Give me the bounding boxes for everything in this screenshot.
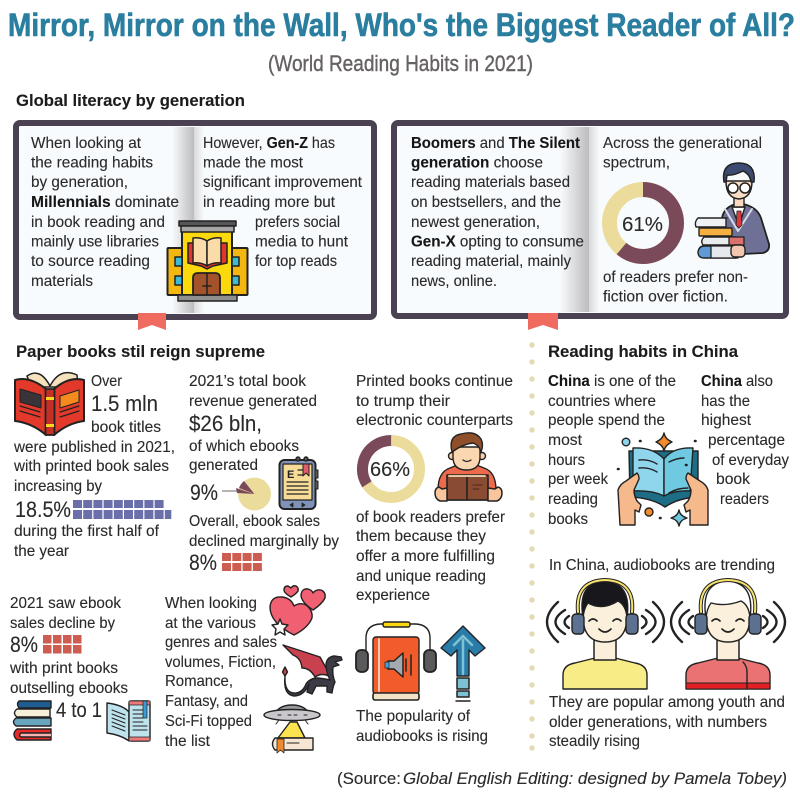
text: china hours: most — [548, 432, 583, 449]
text: genres: the list — [165, 733, 211, 750]
text: millennials: Millennials dominate — [31, 194, 179, 211]
text: china percentage: of everyday — [712, 452, 789, 469]
text: genres: When looking — [165, 595, 257, 612]
icon: hearts — [270, 586, 325, 635]
text: 4 to 1: 4 to 1 — [56, 699, 102, 722]
text: printed books: to trump their — [356, 393, 451, 410]
heading: china: Reading habits in China — [548, 342, 739, 361]
text: millennials: materials — [31, 273, 93, 290]
donut chart: 66%: 66% — [370, 459, 410, 481]
text: printed books: Printed books continue — [356, 373, 513, 390]
donut chart: 66% — [352, 430, 430, 508]
text: book readers prefer: of book readers prefer — [356, 509, 506, 526]
text: book revenue: $26 bln, — [189, 411, 262, 436]
text: ebook decline — [189, 513, 339, 575]
text: boomers: on bestsellers, and the — [411, 194, 561, 211]
text: china hours: hours — [548, 452, 585, 469]
text: 1.5 mln titles: were published in 2021, — [13, 439, 175, 456]
text: book readers prefer — [356, 509, 506, 604]
text: boomers: Boomers and The Silent — [411, 135, 581, 152]
text: generational spectrum: spectrum, — [603, 154, 670, 172]
text: ebook decline: 8% — [189, 550, 217, 575]
text: audiobooks popular — [549, 694, 785, 750]
pictogram: 8% squares second — [43, 635, 82, 654]
text: book readers prefer: experience — [356, 587, 430, 604]
text: audiobooks rising: audiobooks is rising — [356, 728, 488, 745]
text: gen-z — [203, 135, 363, 270]
text: 1.5 mln titles: Over — [91, 373, 123, 390]
text: genres: Sci-Fi topped — [165, 713, 252, 730]
text: boomers: newest generation, — [411, 214, 540, 231]
text: china percentage: highest — [701, 412, 752, 429]
text: audiobooks trending: In China, audiobooks are trending — [549, 557, 775, 574]
text: genres: volumes, Fiction, — [165, 654, 276, 671]
text: millennials: in book reading and — [31, 214, 165, 231]
arrow: rising popularity — [441, 626, 485, 701]
text: book revenue: revenue generated — [189, 393, 317, 410]
text: 1.5 mln titles: book titles — [91, 419, 161, 436]
text: printed books: electronic counterparts — [356, 412, 513, 429]
text: boomers: generation choose — [411, 154, 543, 172]
subtitle: (World Reading Habits in 2021) — [268, 51, 533, 76]
text: ebook decline: declined marginally by — [189, 533, 339, 550]
text: genres: Fantasy, and — [165, 693, 248, 710]
text: china hours: people spend the — [548, 412, 665, 429]
text: book revenue: generated — [189, 457, 258, 474]
panel: open book left — [16, 123, 374, 330]
text: gen-z: in reading more but — [203, 194, 336, 211]
icon: student with glasses and books — [695, 163, 769, 258]
text: millennials: When looking at — [31, 135, 142, 152]
text: generational spectrum — [603, 135, 762, 172]
text: china percentage — [701, 373, 789, 508]
text: boomers: Gen-X opting to consume — [411, 234, 584, 250]
text: generational spectrum: Across the generational — [603, 135, 762, 152]
text: china hours: countries where — [548, 393, 656, 410]
text: audiobooks rising — [356, 708, 488, 745]
text: non-fiction: of readers prefer non- — [603, 269, 748, 286]
text: book revenue: of which ebooks — [189, 438, 299, 455]
text: millennials: by generation, — [31, 174, 128, 191]
pie chart: 9% ebooks — [222, 478, 271, 510]
text: genres — [165, 595, 277, 750]
text: gen-z: made the most — [203, 154, 304, 172]
bookmark — [138, 313, 166, 330]
text: gen-z: However, Gen-Z has — [203, 135, 335, 152]
text: ebook sales decline: outselling ebooks — [10, 680, 128, 697]
text: gen-z: for top reads — [255, 253, 337, 270]
text: book readers prefer: and unique reading — [356, 568, 486, 585]
text: audiobooks rising: The popularity of — [356, 708, 471, 725]
text: china hours: books — [548, 511, 588, 528]
icon: ebook and print pair — [107, 701, 150, 741]
text: 1.5 mln titles: 18.5% — [15, 497, 71, 522]
icon: library building — [168, 221, 248, 301]
text: non-fiction: fiction over fiction. — [603, 288, 728, 306]
text: 1.5 mln titles: with printed book sales — [13, 458, 169, 475]
text: millennials: mainly use libraries — [31, 234, 159, 250]
donut chart: 61%: 61% — [622, 214, 663, 236]
icon: stack of print books — [14, 701, 51, 740]
text: gen-z: media to hunt — [255, 234, 349, 250]
text: china hours: per week — [548, 471, 609, 488]
text: 1.5 mln titles: increasing by — [14, 478, 102, 495]
bookmark — [528, 313, 558, 330]
icon: dragon — [282, 645, 342, 696]
text: non-fiction — [603, 269, 748, 306]
text: ebook sales decline: 2021 saw ebook — [10, 595, 122, 612]
icon: sci-fi ufo and book — [264, 705, 320, 753]
text: 1.5 mln titles — [13, 373, 175, 560]
icon: audiobook with headphones — [356, 622, 436, 700]
decorative dotted divider — [529, 342, 535, 751]
panel: open book right — [394, 123, 786, 330]
text: printed books — [356, 373, 513, 429]
text: book revenue: 9% — [190, 480, 218, 505]
text: ebook sales decline: 8% — [10, 632, 38, 657]
text: audiobooks popular: older generations, with numbers — [549, 714, 767, 731]
text: genres: genres and sales — [165, 634, 277, 651]
heading: global literacy: Global literacy by generation — [16, 91, 245, 110]
text: book readers prefer: offer a more fulfilling — [356, 548, 495, 565]
text: china hours: reading — [548, 491, 598, 508]
text: 1.5 mln titles: the year — [14, 543, 70, 560]
text: genres: Romance, — [165, 673, 233, 690]
text: ebook sales decline: sales decline by — [10, 615, 115, 632]
text: millennials — [31, 135, 179, 290]
text: 1.5 mln titles: during the first half of — [14, 523, 160, 540]
text: ebook sales decline: with print books — [9, 660, 118, 677]
text: book revenue — [189, 373, 317, 505]
text: gen-z: significant improvement — [203, 174, 363, 191]
text: boomers: reading materials based — [411, 174, 570, 191]
text: audiobooks popular: steadily rising — [549, 733, 640, 750]
text: boomers: news, online. — [411, 273, 497, 290]
text: millennials: the reading habits — [31, 154, 153, 172]
text: china percentage: readers — [720, 491, 769, 508]
icon: e-reader: E — [287, 469, 294, 481]
donut chart: 61% — [610, 190, 676, 256]
heading: paper books: Paper books stil reign supreme — [16, 342, 265, 361]
text: china hours: China is one of the — [548, 373, 676, 390]
icon: hands holding book — [618, 433, 708, 526]
source line: (Source: — [337, 769, 401, 788]
text: millennials: to source reading — [31, 253, 150, 270]
text: ebook decline: Overall, ebook sales — [189, 513, 320, 530]
text: ebook sales decline — [9, 595, 128, 697]
text: china percentage: percentage — [708, 432, 785, 449]
source line: Global English Editing: designed by Pamela Tobey) — [403, 769, 787, 788]
text: china percentage: has the — [701, 393, 750, 410]
text: boomers — [411, 135, 584, 290]
pictogram: 18.5% squares — [73, 500, 171, 519]
text: 1.5 mln titles: 1.5 mln — [91, 391, 158, 416]
icon: e-reader — [280, 457, 318, 509]
text: book revenue: 2021’s total book — [189, 373, 307, 390]
pictogram: 8% squares — [222, 553, 262, 571]
text: boomers: reading material, mainly — [411, 253, 571, 270]
text: china hours — [548, 373, 676, 528]
text: gen-z: prefers social — [255, 214, 340, 231]
icon: youth with headphones — [547, 580, 664, 689]
text: book readers prefer: them because they — [356, 528, 486, 545]
icon: reader with book — [435, 433, 502, 501]
text: china percentage: China also — [701, 373, 773, 390]
icon: older adult with headphones — [671, 580, 785, 689]
text: genres: at the various — [165, 615, 256, 632]
text: audiobooks popular: They are popular among youth and — [549, 694, 785, 711]
icon: red book — [15, 373, 84, 435]
text: china percentage: book — [716, 471, 751, 488]
